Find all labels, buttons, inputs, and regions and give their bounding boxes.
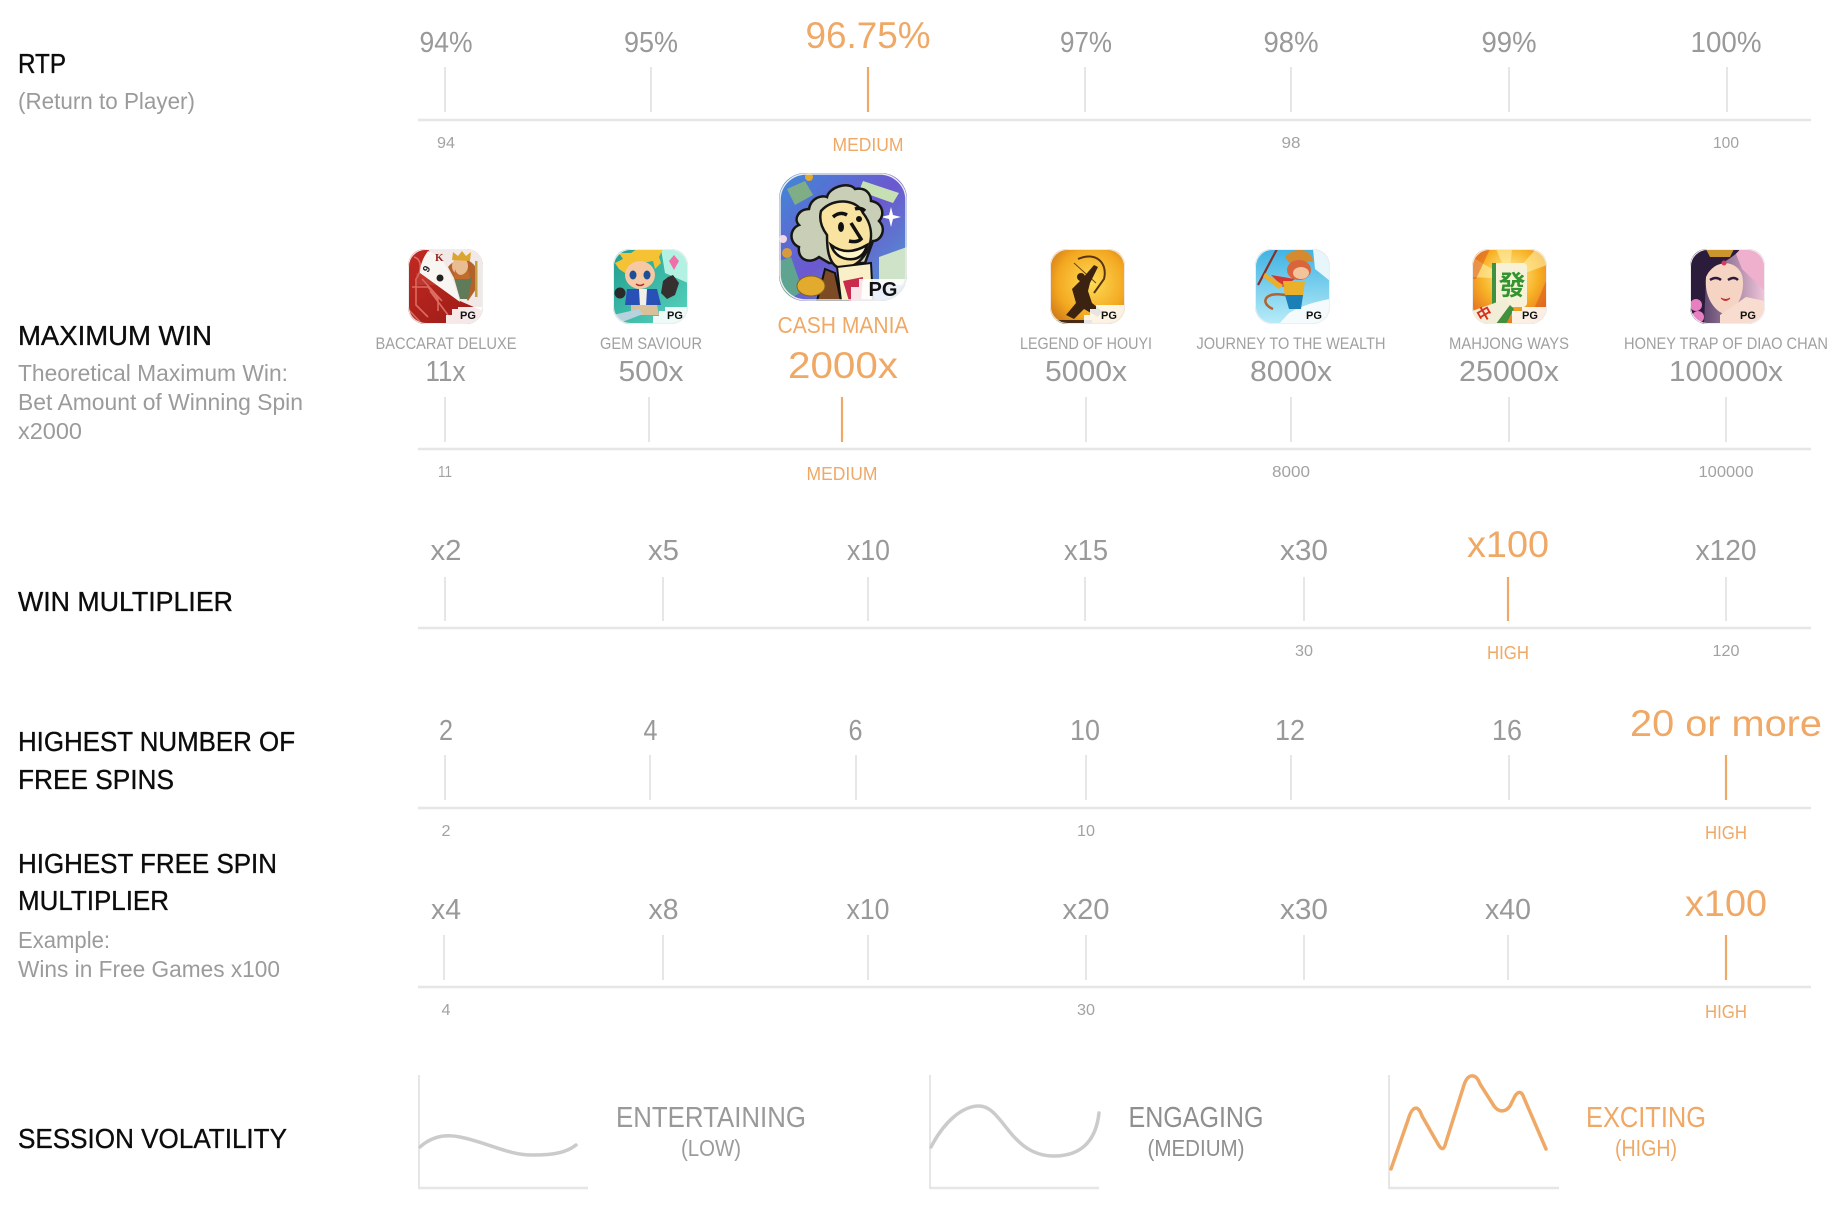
- RTP value labels: 96.75%: [806, 15, 930, 56]
- free spin multiplier captions: 4: [442, 1002, 451, 1019]
- maximum win values: 2000x: [788, 345, 899, 386]
- win multiplier values: [430, 524, 1756, 567]
- free spin count values: [439, 703, 1822, 747]
- game names: GEM SAVIOUR: [600, 334, 702, 353]
- free spin count values: 16: [1492, 715, 1522, 747]
- free spin multiplier ticks and axis: [418, 935, 1811, 987]
- free spin count values: 4: [644, 715, 658, 747]
- game names: JOURNEY TO THE WEALTH: [1196, 334, 1386, 353]
- icon: Gem Saviour: PG: [667, 310, 683, 322]
- maximum win values: 25000x: [1459, 356, 1560, 388]
- RTP scale captions: [437, 135, 1739, 155]
- maximum win values: 5000x: [1045, 356, 1128, 388]
- heading: RTP: RTP: [18, 48, 66, 79]
- icon: Baccarat Deluxe: K: [435, 252, 444, 264]
- medium volatility label: [1128, 1102, 1264, 1161]
- free spin multiplier values: x4: [431, 894, 461, 926]
- panel: win multiplier row: [18, 524, 1811, 663]
- free spin multiplier values: x20: [1062, 894, 1110, 926]
- subtext: multiplier example: Example:: [18, 927, 110, 953]
- free spin multiplier values: [431, 883, 1767, 926]
- maximum win captions: 8000: [1272, 464, 1310, 481]
- free spin count captions: HIGH: [1705, 823, 1747, 843]
- icon: Legend of Houyi: PG: [1101, 310, 1117, 322]
- icon: Baccarat Deluxe: PG: [460, 310, 476, 322]
- icon: Mahjong Ways: 發: [1498, 264, 1526, 303]
- RTP value labels: 99%: [1482, 27, 1536, 59]
- subtext: return to player: (Return to Player): [18, 88, 195, 114]
- RTP value labels: 98%: [1264, 27, 1318, 59]
- heading: session volatility: SESSION VOLATILITY: [18, 1123, 287, 1154]
- medium volatility label: ENGAGING: [1128, 1102, 1264, 1134]
- subtext: maximum win explanation: [18, 360, 303, 444]
- win multiplier ticks and axis: [418, 577, 1811, 628]
- free spin count values: 2: [439, 715, 453, 747]
- win multiplier values: x100: [1467, 524, 1549, 565]
- chart: low volatility curve: [418, 1075, 588, 1189]
- high volatility label: EXCITING: [1586, 1102, 1706, 1134]
- panel: highest free spin multiplier row: [18, 848, 1811, 1022]
- game names: LEGEND OF HOUYI: [1020, 334, 1152, 353]
- subtext: maximum win explanation: x2000: [18, 418, 82, 444]
- panel: maximum win row: [18, 173, 1828, 484]
- free spin count captions: [442, 823, 1747, 843]
- RTP scale captions: 98: [1282, 135, 1301, 152]
- icon: Baccarat Deluxe: 9: [421, 264, 434, 274]
- icon: Journey to the Wealth: PG: [1306, 310, 1322, 322]
- heading: highest free spin multiplier: MULTIPLIER: [18, 885, 169, 916]
- icon: Legend of Houyi: [1050, 249, 1125, 324]
- chart: high volatility curve: [1389, 1075, 1559, 1189]
- maximum win values: 500x: [618, 356, 684, 388]
- game names: MAHJONG WAYS: [1449, 334, 1569, 353]
- RTP value labels: 100%: [1690, 27, 1762, 59]
- free spin multiplier values: x8: [648, 894, 678, 926]
- heading: highest free spin multiplier: [18, 848, 277, 916]
- free spin multiplier captions: HIGH: [1705, 1002, 1747, 1022]
- panel: RTP row: [18, 15, 1811, 155]
- RTP scale captions: MEDIUM: [832, 135, 904, 155]
- maximum win values: 11x: [426, 356, 466, 388]
- icon: Journey to the Wealth: [1255, 249, 1330, 324]
- win multiplier captions: 120: [1712, 643, 1740, 660]
- RTP scale ticks and axis: [418, 67, 1811, 120]
- free spin count ticks and axis: [418, 755, 1811, 808]
- free spin multiplier captions: 30: [1077, 1002, 1095, 1019]
- free spin multiplier values: x100: [1685, 883, 1767, 924]
- high volatility label: [1586, 1102, 1706, 1161]
- free spin count captions: 2: [442, 823, 451, 840]
- icon: Honey Trap of Diao Chan: PG: [1740, 310, 1756, 322]
- subtext: multiplier example: [18, 927, 280, 982]
- win multiplier values: x2: [430, 535, 462, 567]
- icon: Mahjong Ways: [1472, 249, 1547, 326]
- maximum win values: 100000x: [1669, 356, 1784, 388]
- free spin count values: 6: [848, 715, 862, 747]
- subtext: multiplier example: Wins in Free Games x100: [18, 956, 280, 982]
- icon: Mahjong Ways: PG: [1522, 310, 1538, 322]
- maximum win captions: [438, 464, 1754, 484]
- win multiplier captions: [1295, 643, 1740, 663]
- RTP value labels: 97%: [1060, 27, 1112, 59]
- icon: Honey Trap of Diao Chan: [1690, 249, 1765, 324]
- game names: CASH MANIA: [778, 312, 909, 338]
- RTP value labels: [420, 15, 1762, 59]
- icon: Gem Saviour: [613, 249, 688, 324]
- heading: highest free spin multiplier: HIGHEST FREE SPIN: [18, 848, 277, 879]
- maximum win values: 8000x: [1250, 356, 1333, 388]
- maximum win captions: 11: [438, 464, 452, 481]
- win multiplier values: x30: [1280, 535, 1328, 567]
- chart: medium volatility curve: [930, 1075, 1099, 1189]
- panel: highest number of free spins row: [18, 703, 1822, 843]
- panel: session volatility row: [18, 1075, 1706, 1189]
- RTP value labels: 95%: [624, 27, 678, 59]
- win multiplier captions: 30: [1295, 643, 1313, 660]
- free spin count values: 20 or more: [1630, 703, 1822, 744]
- free spin multiplier values: x10: [846, 894, 890, 926]
- free spin multiplier values: x40: [1485, 894, 1531, 926]
- heading: highest number of free spins: FREE SPINS: [18, 764, 174, 795]
- low volatility label: (LOW): [681, 1135, 741, 1161]
- maximum win captions: MEDIUM: [806, 464, 878, 484]
- high volatility label: (HIGH): [1615, 1135, 1677, 1161]
- low volatility label: ENTERTAINING: [616, 1102, 806, 1134]
- game names: [376, 312, 1828, 353]
- icon: Mahjong Ways: 中: [1472, 301, 1496, 326]
- maximum win values: [426, 345, 1784, 388]
- RTP value labels: 94%: [420, 27, 472, 59]
- RTP scale captions: 100: [1713, 135, 1739, 152]
- free spin count values: 12: [1275, 715, 1305, 747]
- maximum win ticks and axis: [418, 397, 1811, 449]
- win multiplier values: x10: [847, 535, 890, 567]
- medium volatility label: (MEDIUM): [1148, 1135, 1244, 1161]
- icon: Cash Mania: [779, 173, 907, 301]
- heading: highest number of free spins: [18, 726, 295, 795]
- heading: win multiplier: WIN MULTIPLIER: [18, 586, 233, 617]
- RTP scale captions: 94: [437, 135, 455, 152]
- win multiplier values: x120: [1696, 535, 1756, 567]
- low volatility label: [616, 1102, 806, 1161]
- subtext: maximum win explanation: Bet Amount of Winning Spin: [18, 389, 303, 415]
- heading: maximum win: MAXIMUM WIN: [18, 320, 212, 351]
- maximum win captions: 100000: [1698, 464, 1754, 481]
- game names: BACCARAT DELUXE: [376, 334, 516, 353]
- heading: highest number of free spins: HIGHEST NUMBER OF: [18, 726, 295, 757]
- free spin multiplier captions: [442, 1002, 1747, 1022]
- free spin multiplier values: x30: [1280, 894, 1328, 926]
- win multiplier values: x15: [1064, 535, 1108, 567]
- icon: Baccarat Deluxe: [408, 249, 483, 324]
- subtext: maximum win explanation: Theoretical Maximum Win:: [18, 360, 288, 386]
- win multiplier captions: HIGH: [1487, 643, 1529, 663]
- free spin count values: 10: [1070, 715, 1100, 747]
- icon: Cash Mania: PG: [869, 279, 897, 301]
- free spin count captions: 10: [1077, 823, 1095, 840]
- win multiplier values: x5: [648, 535, 679, 567]
